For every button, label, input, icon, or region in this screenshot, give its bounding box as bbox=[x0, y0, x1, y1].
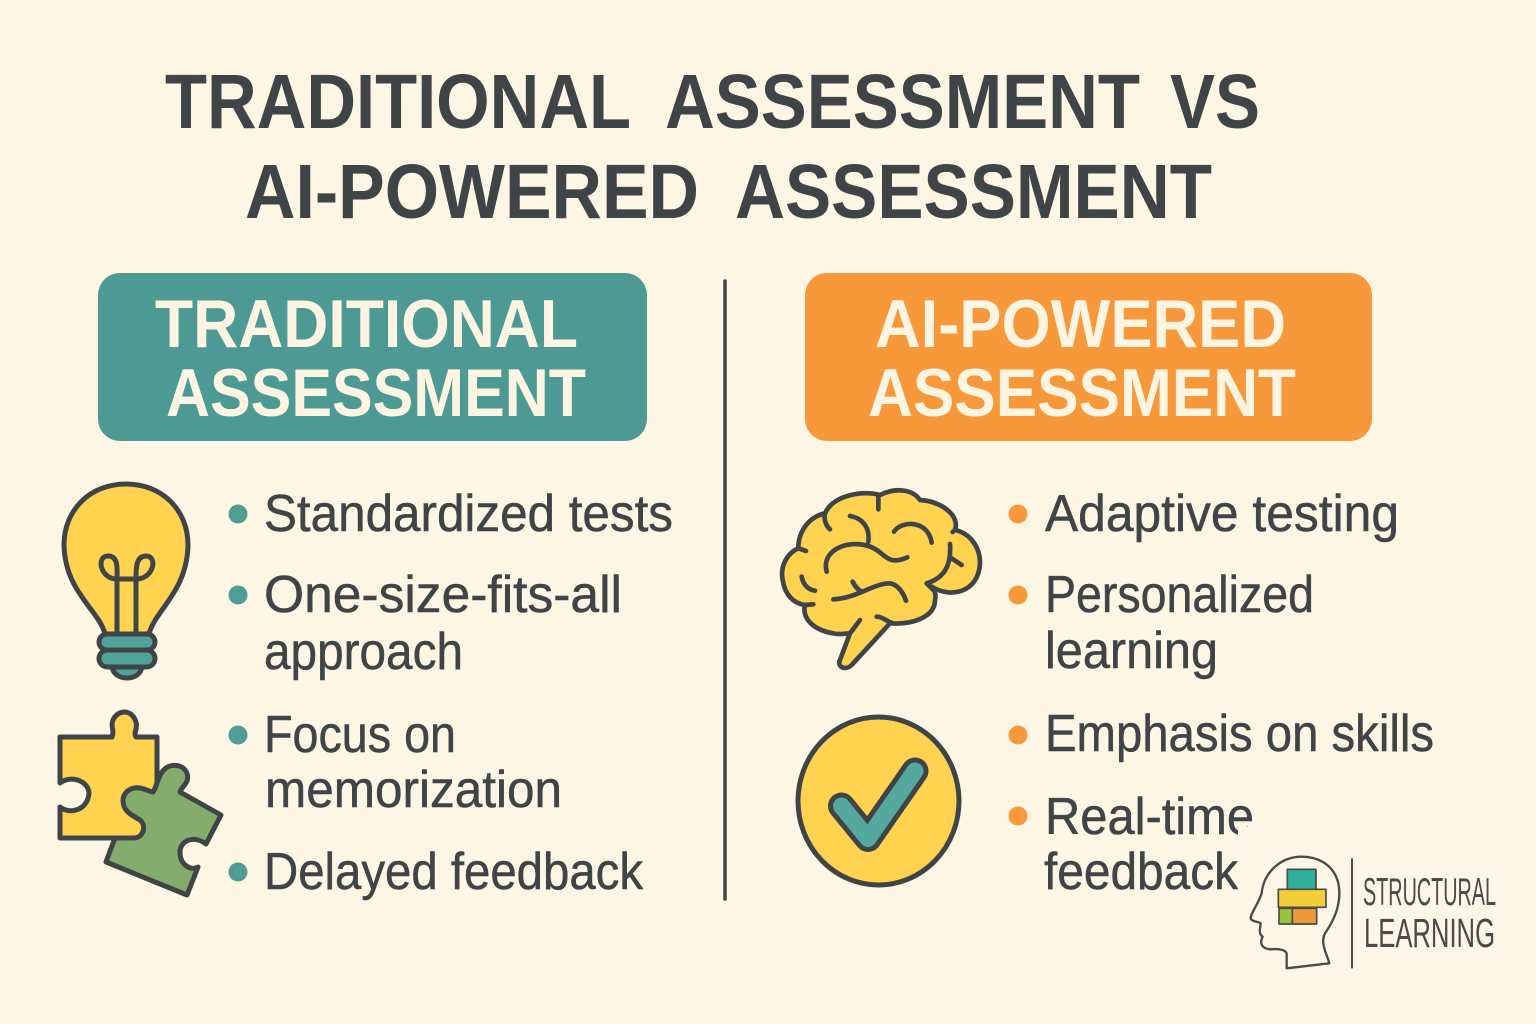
title: ASSESSMENT bbox=[735, 149, 1212, 235]
title: AI-POWERED bbox=[245, 149, 699, 235]
panel: traditional assessment heading: ASSESSMENT bbox=[166, 355, 586, 431]
title: TRADITIONAL bbox=[165, 59, 631, 145]
bullet: focus on memorization bbox=[228, 706, 562, 819]
icon: brain bbox=[782, 490, 980, 668]
bullet: emphasis on skills: Emphasis on skills bbox=[1045, 705, 1434, 763]
list: traditional assessment features bbox=[228, 485, 673, 901]
logo wordmark bbox=[1363, 871, 1496, 956]
bullet: real-time feedback bbox=[1008, 788, 1254, 901]
bullet: personalized learning: Personalized bbox=[1045, 566, 1314, 624]
bullet: one-size-fits-all approach: One-size-fits-all bbox=[264, 566, 622, 624]
panel: traditional assessment heading: TRADITIONAL bbox=[155, 286, 578, 362]
bullet: one-size-fits-all approach bbox=[228, 566, 622, 681]
bullet: focus on memorization: memorization bbox=[265, 761, 562, 819]
center divider bbox=[723, 281, 727, 899]
logo head icon bbox=[1251, 857, 1352, 968]
panel: AI-powered assessment heading: AI-POWERED bbox=[875, 286, 1286, 362]
panel: AI-powered assessment heading bbox=[805, 273, 1372, 441]
bullet: one-size-fits-all approach: approach bbox=[264, 623, 463, 681]
bullet: delayed feedback: Delayed feedback bbox=[264, 843, 644, 901]
panel: AI-powered assessment heading: ASSESSMENT bbox=[868, 355, 1296, 431]
icon: check mark badge bbox=[798, 717, 959, 885]
title bbox=[165, 59, 1260, 235]
bullet: real-time feedback: feedback bbox=[1044, 843, 1239, 901]
bullet: real-time feedback: Real-time bbox=[1045, 788, 1254, 846]
logo: Structural Learning bbox=[1238, 827, 1512, 987]
bullet: focus on memorization: Focus on bbox=[264, 706, 456, 764]
list: AI-powered assessment features bbox=[1008, 485, 1434, 901]
bullet: adaptive testing: Adaptive testing bbox=[1045, 485, 1399, 543]
bullet: standardized tests: Standardized tests bbox=[264, 485, 673, 543]
icon: puzzle pieces bbox=[60, 712, 221, 895]
title: ASSESSMENT bbox=[665, 59, 1140, 145]
title: VS bbox=[1170, 59, 1260, 145]
bullet: personalized learning: learning bbox=[1045, 622, 1218, 680]
icon: light bulb bbox=[64, 484, 188, 678]
panel: traditional assessment heading bbox=[98, 273, 647, 441]
bullet: personalized learning bbox=[1008, 566, 1314, 680]
